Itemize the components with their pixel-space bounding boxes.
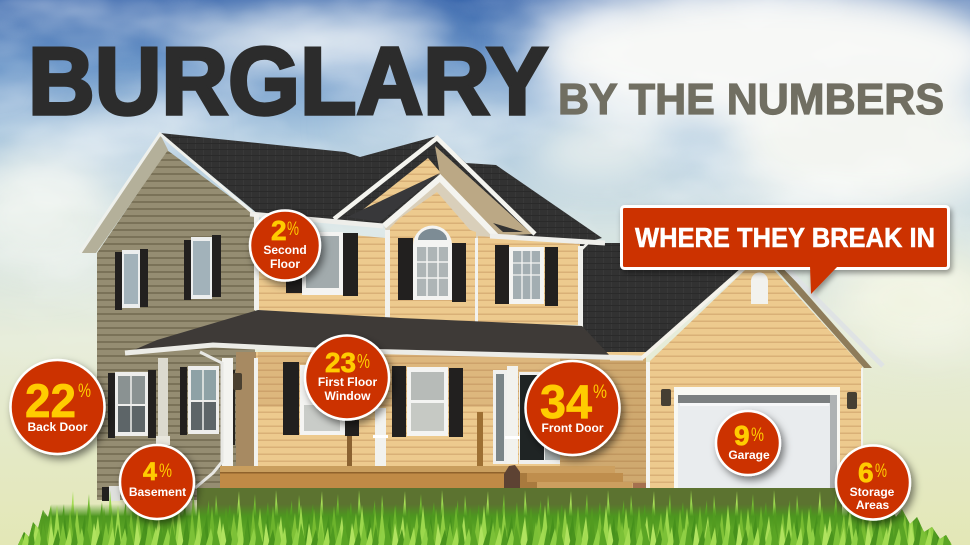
basement window — [102, 487, 109, 501]
porch lamp — [233, 373, 242, 390]
stat: storage areas 6%: Areas — [856, 498, 890, 512]
subtitle: BY THE NUMBERS — [558, 75, 944, 124]
right roof — [578, 243, 745, 360]
left wing windows — [115, 252, 122, 310]
stat: second floor 2%: % — [287, 219, 299, 240]
house — [80, 133, 883, 501]
small shrub — [504, 465, 520, 488]
foundation step — [633, 483, 674, 491]
stat: first floor window 23%: Window — [325, 389, 371, 403]
stat: front door 34%: 34 — [540, 375, 592, 428]
stat: basement 4%: 4 — [143, 458, 157, 486]
stat: front door 34%: Front Door — [542, 421, 604, 435]
stat: garage 9%: % — [751, 425, 764, 446]
lower wall — [236, 352, 646, 490]
stat: first floor window 23% — [305, 336, 389, 420]
downspout — [195, 352, 222, 488]
stat: first floor window 23%: % — [357, 351, 370, 373]
upper right window — [495, 245, 509, 304]
stat: front door 34% — [526, 361, 620, 455]
stat: basement 4%: % — [159, 461, 172, 482]
stat: front door 34%: % — [593, 382, 607, 403]
stat: first floor window 23%: 23 — [325, 347, 356, 378]
stat: storage areas 6%: Storage — [850, 485, 895, 499]
stat: storage areas 6% — [836, 446, 910, 520]
lower middle shutters and window — [283, 362, 299, 435]
front door — [493, 370, 507, 464]
callout: where they break in: WHERE THEY BREAK IN — [635, 222, 935, 253]
stat: basement 4%: Basement — [129, 485, 186, 499]
stat: garage 9%: 9 — [734, 420, 750, 451]
stat: second floor 2%: 2 — [271, 215, 287, 246]
stat: storage areas 6%: % — [875, 461, 887, 482]
garage wall — [650, 268, 862, 490]
stat: garage 9% — [716, 411, 780, 475]
lawn — [197, 488, 842, 528]
grass — [0, 488, 970, 545]
stat: back door 22% — [10, 360, 104, 454]
upper walls — [258, 226, 385, 318]
left gable soffit and trim — [80, 134, 168, 253]
upper gable trims — [334, 138, 535, 234]
stat: first floor window 23%: First Floor — [318, 375, 377, 389]
stat: back door 22%: % — [78, 381, 91, 402]
porch roof — [127, 310, 612, 358]
left wing wall — [97, 150, 255, 500]
lower left windows — [108, 373, 115, 438]
stat: storage areas 6%: 6 — [858, 457, 874, 488]
stat: second floor 2% — [250, 210, 320, 280]
stat: basement 4% — [120, 445, 194, 519]
title: BURGLARY — [28, 28, 548, 135]
stat: second floor 2%: Second — [263, 243, 307, 257]
main roof — [160, 133, 602, 244]
upper arched window — [398, 238, 413, 300]
title — [28, 28, 944, 135]
gable soffit — [435, 146, 532, 236]
downspout upper — [581, 243, 588, 324]
attic vent — [751, 272, 768, 304]
stat: garage 9%: Garage — [728, 448, 770, 462]
deck and steps — [220, 466, 520, 488]
porch columns — [158, 358, 168, 445]
garage lamps — [661, 389, 671, 406]
stat: back door 22%: 22 — [25, 374, 76, 427]
stat: second floor 2%: Floor — [270, 257, 300, 271]
upper left shutters and window — [286, 278, 302, 293]
stat: back door 22%: Back Door — [27, 420, 88, 434]
garage door — [674, 387, 840, 490]
callout: where they break in — [622, 206, 948, 294]
